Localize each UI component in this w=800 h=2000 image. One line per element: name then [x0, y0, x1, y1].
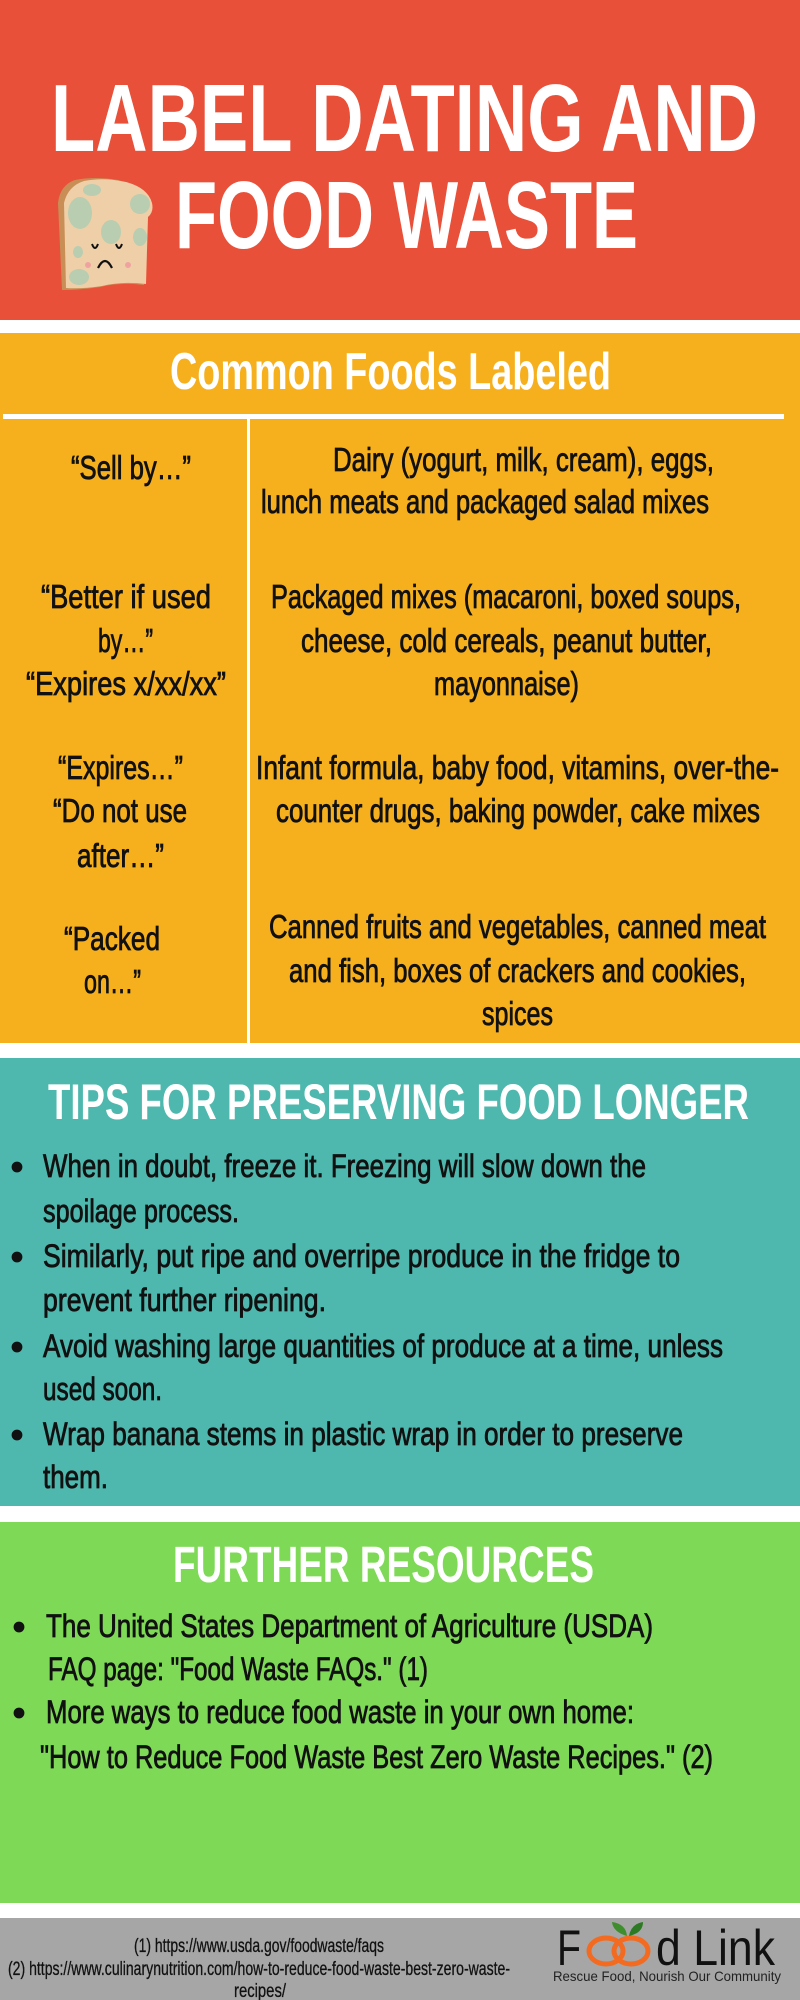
tips list: [12, 1148, 723, 1495]
table: label phrases: by…”: [98, 622, 153, 659]
heading: further resources: FURTHER RESOURCES: [173, 1536, 594, 1593]
table: label phrases: “Expires…”: [58, 749, 183, 786]
table: label phrases: after…”: [77, 837, 164, 874]
footer references: (2) https://www.culinarynutrition.com/how-to-reduce-food-waste-best-zero-waste-: [8, 1959, 510, 1980]
table: label phrases: “Sell by…”: [71, 449, 191, 486]
table: food types: spices: [482, 995, 553, 1032]
icon: moldy bread: [58, 178, 152, 290]
table: label phrases: on…”: [84, 963, 141, 1000]
panel: tips: [0, 1058, 800, 1506]
table: food types: [256, 441, 779, 1032]
tips list: When in doubt, freeze it. Freezing will slow down the: [43, 1148, 646, 1184]
resources list: More ways to reduce food waste in your own home:: [46, 1694, 634, 1730]
table: label phrases: “Expires x/xx/xx”: [26, 665, 226, 702]
table: label phrases: [26, 449, 226, 1000]
resources list: FAQ page: "Food Waste FAQs." (1): [48, 1651, 428, 1687]
logo: food link: [553, 1920, 781, 1984]
title: [51, 65, 758, 269]
tips list: spoilage process.: [43, 1193, 239, 1229]
panel: further resources: [0, 1522, 800, 1903]
footer references: (1) https://www.usda.gov/foodwaste/faqs: [134, 1936, 384, 1957]
footer: [0, 1918, 800, 2000]
tips list: used soon.: [43, 1371, 162, 1407]
panel: common foods labeled: [0, 333, 800, 1043]
tips list: them.: [43, 1459, 108, 1495]
footer references: [8, 1936, 510, 2000]
table: label phrases: “Better if used: [41, 578, 211, 615]
tips list: Similarly, put ripe and overripe produce in the fridge to: [43, 1238, 680, 1274]
logo: food link: F: [557, 1920, 581, 1976]
logo: food link: d Link: [656, 1920, 776, 1976]
heading: common foods labeled: Common Foods Labeled: [170, 343, 611, 401]
logo: food link: Rescue Food, Nourish Our Community: [553, 1968, 781, 1984]
tips list: prevent further ripening.: [43, 1282, 326, 1318]
resources list: The United States Department of Agriculture (USDA): [46, 1608, 653, 1644]
resources list: [14, 1608, 713, 1775]
table: label phrases: “Do not use: [53, 792, 187, 829]
table: label phrases: “Packed: [64, 920, 160, 957]
header panel: [0, 0, 800, 320]
table: food types: mayonnaise): [434, 665, 579, 702]
